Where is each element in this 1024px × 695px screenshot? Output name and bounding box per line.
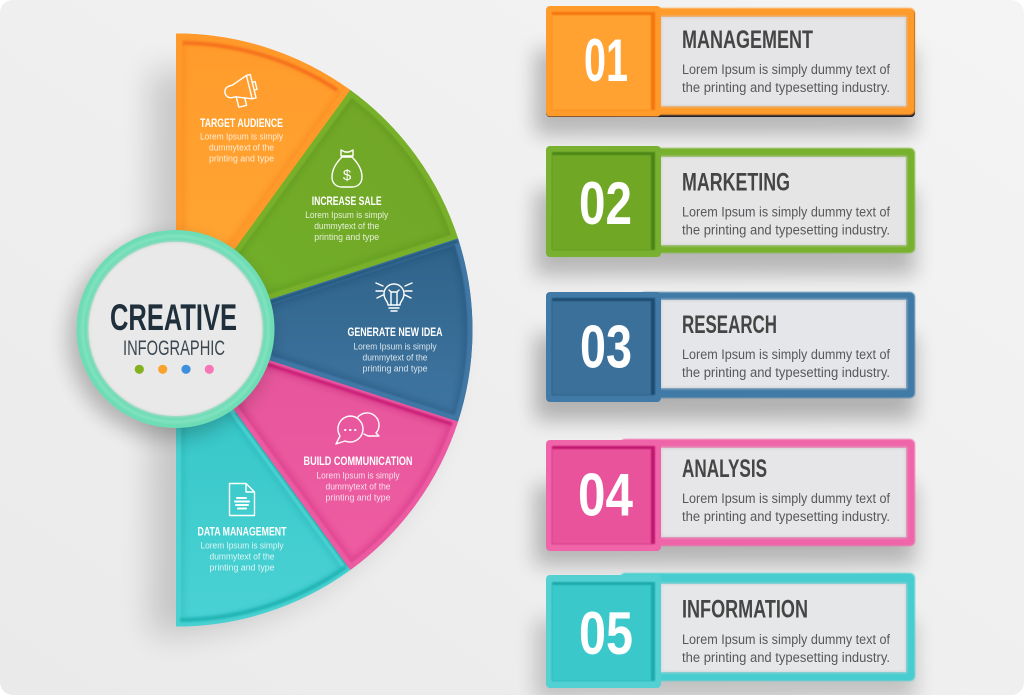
text: research body xyxy=(682,347,890,380)
text: increase sale body: printing and type xyxy=(314,232,379,243)
segment: data management xyxy=(176,409,350,626)
text: data management body: dummytext of the xyxy=(210,552,274,562)
text: build communication body xyxy=(316,470,400,504)
text: target audience body: printing and type xyxy=(209,154,274,164)
text: information body: Lorem Ipsum is simply dummy text of xyxy=(682,632,890,647)
text: increase sale body: Lorem Ipsum is simply xyxy=(305,210,388,221)
text: increase sale body xyxy=(305,210,388,243)
number: 05: 05 xyxy=(579,600,633,667)
text: increase sale body: dummytext of the xyxy=(314,221,379,232)
heading: marketing: MARKETING xyxy=(682,168,790,196)
title: generate new idea: GENERATE NEW IDEA xyxy=(348,325,443,339)
title: data management: DATA MANAGEMENT xyxy=(198,524,287,538)
text: data management body: Lorem Ipsum is simply xyxy=(200,540,284,552)
heading: research: RESEARCH xyxy=(682,311,777,339)
text: build communication body: printing and type xyxy=(326,492,390,504)
text: generate new idea body: Lorem Ipsum is simply xyxy=(354,342,437,352)
card 4: analysis xyxy=(535,439,915,565)
text: analysis body: the printing and typesetting industry. xyxy=(682,509,890,524)
panel: semicircular wheel xyxy=(176,33,473,627)
text: marketing body: the printing and typesetting industry. xyxy=(682,222,890,238)
text: generate new idea body xyxy=(354,342,437,374)
text: management body xyxy=(682,62,890,95)
card 2: marketing xyxy=(535,146,915,275)
title: increase sale: INCREASE SALE xyxy=(312,194,382,208)
icon: chat bubbles xyxy=(336,413,379,444)
text: data management body xyxy=(200,540,284,574)
text: target audience body: Lorem Ipsum is simply xyxy=(200,132,283,142)
text: management body: the printing and typesetting industry. xyxy=(682,80,890,95)
center circle shadow xyxy=(68,238,268,438)
icon: money bag xyxy=(332,150,362,187)
segment: generate new idea xyxy=(270,238,472,422)
segment: increase sale xyxy=(234,90,458,300)
text: target audience body xyxy=(200,132,283,164)
text: research body: Lorem Ipsum is simply dummy text of xyxy=(682,347,890,362)
segment: build communication xyxy=(234,360,458,570)
icon: money bag: $ xyxy=(343,167,352,184)
text: generate new idea body: dummytext of the xyxy=(362,352,428,364)
text: target audience body: dummytext of the xyxy=(209,142,274,154)
legend dots xyxy=(135,365,214,374)
title: build communication: BUILD COMMUNICATION xyxy=(304,454,412,468)
text: data management body: printing and type xyxy=(210,562,274,574)
card 3: research xyxy=(535,292,915,420)
text: marketing body: Lorem Ipsum is simply dummy text of xyxy=(682,204,890,220)
icon: megaphone xyxy=(224,74,258,108)
card 5: information xyxy=(535,573,915,695)
wheel shadow xyxy=(151,70,451,635)
heading: management: MANAGEMENT xyxy=(682,26,813,54)
text: analysis body: Lorem Ipsum is simply dummy text of xyxy=(682,491,890,506)
title: target audience: TARGET AUDIENCE xyxy=(200,116,283,130)
heading: analysis: ANALYSIS xyxy=(682,455,767,483)
text: marketing body xyxy=(682,204,890,238)
card 1: management xyxy=(535,6,915,135)
heading: information: INFORMATION xyxy=(682,596,808,624)
icon: document xyxy=(230,484,254,516)
number: 04: 04 xyxy=(578,462,634,528)
segment: target audience xyxy=(176,34,350,250)
title: creative: CREATIVE xyxy=(110,297,237,338)
text: information body xyxy=(682,632,890,665)
subtitle: infographic: INFOGRAPHIC xyxy=(123,337,225,360)
text: generate new idea body: printing and type xyxy=(362,364,428,374)
icon: light bulb xyxy=(376,283,412,311)
text: research body: the printing and typesetting industry. xyxy=(682,365,890,380)
text: build communication body: dummytext of the xyxy=(326,482,390,492)
number: 03: 03 xyxy=(580,314,632,380)
text: management body: Lorem Ipsum is simply dummy text of xyxy=(682,62,890,77)
number: 02: 02 xyxy=(579,170,632,237)
center badge xyxy=(76,230,274,428)
number: 01: 01 xyxy=(584,27,628,94)
text: information body: the printing and typesetting industry. xyxy=(682,650,890,665)
text: build communication body: Lorem Ipsum is simply xyxy=(316,470,400,482)
text: analysis body xyxy=(682,491,890,524)
